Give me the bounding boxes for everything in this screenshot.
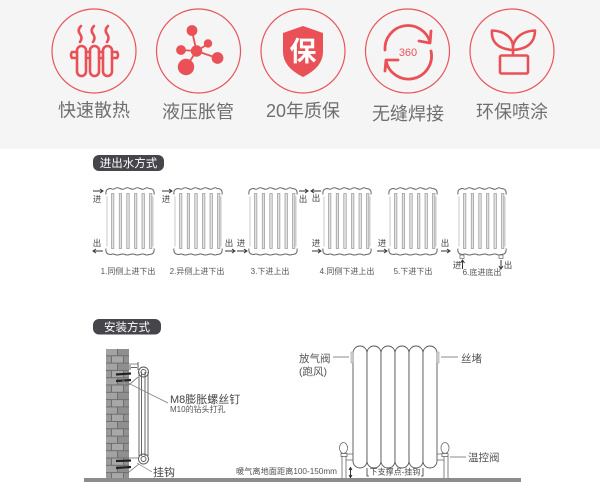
- diagram 2: opposite side top in bottom out: 出: [225, 238, 233, 248]
- feature: seamless welding: [366, 9, 450, 124]
- top feature band background: [0, 0, 600, 149]
- diagram 6: underside in underside out: [453, 188, 512, 277]
- diagram 5: bottom in bottom out: 5.下进下出: [394, 266, 432, 276]
- diagram 4: same side bottom in top out: [311, 188, 374, 276]
- diagram 1: same side top in bottom out: 1.同侧上进下出: [101, 266, 155, 276]
- diagram 4: same side bottom in top out: 4.同侧下进上出: [320, 266, 374, 276]
- side view installation diagram: [106, 349, 240, 479]
- label: drill hole: M10的钻头打孔: [170, 404, 226, 414]
- icon text: 360: 360: [399, 47, 417, 59]
- expansion screws: [116, 374, 131, 468]
- heading: water inlet and outlet methods: 进出水方式: [100, 156, 158, 170]
- diagram 5: bottom in bottom out: [377, 188, 450, 276]
- label: 20年质保: [266, 101, 340, 121]
- shield character: 保: [290, 37, 316, 67]
- diagram 3: bottom in top out: 3.下进上出: [251, 266, 289, 276]
- diagram 5: bottom in bottom out: 出: [441, 238, 449, 248]
- leader lines: [122, 380, 168, 472]
- right valve: [437, 442, 449, 478]
- label: plug: 丝堵: [461, 352, 482, 365]
- diagram 5: bottom in bottom out: 进: [378, 238, 387, 248]
- icon: shield: [283, 26, 323, 77]
- diagram 3: bottom in top out: 进: [237, 238, 246, 248]
- feature: fast heat dissipation: [52, 9, 136, 120]
- diagram 2: opposite side top in bottom out: 2.异侧上进下出: [170, 266, 224, 276]
- diagram 3: bottom in top out: [237, 188, 308, 276]
- label: 快速散热: [58, 100, 130, 120]
- radiator side profile: [138, 367, 148, 464]
- diagram 2: opposite side top in bottom out: 进: [162, 194, 171, 204]
- leader lines: [333, 357, 466, 457]
- front view radiator with valves: [236, 346, 500, 478]
- icon: molecule nodes: [177, 26, 222, 74]
- icon: potted plant: [492, 30, 535, 74]
- dimension arrow: [130, 362, 138, 370]
- diagram 6: underside in underside out: 进: [453, 260, 462, 270]
- feature: hydraulic expansion: [156, 9, 240, 122]
- floor clearance arrow: [349, 468, 352, 478]
- diagram 4: same side bottom in top out: 进: [312, 238, 321, 248]
- icon: radiator with heat waves: [71, 26, 118, 76]
- diagram 4: same side bottom in top out: 出: [312, 193, 320, 203]
- left valve: [340, 442, 353, 478]
- label: 无缝焊接: [372, 104, 444, 124]
- label: air vent: 放气阀: [299, 352, 330, 365]
- brick wall: [106, 349, 129, 478]
- heading: installation method: [93, 319, 161, 334]
- feature: eco coating: [470, 9, 554, 122]
- feature: 20 year warranty: [261, 9, 345, 121]
- diagram 6: underside in underside out: 6.底进底出: [463, 267, 501, 277]
- diagram 1: same side top in bottom out: [93, 188, 155, 276]
- radiator columns: [353, 346, 437, 468]
- air vent and plug caps: [351, 352, 439, 363]
- heading: installation method: 安装方式: [104, 320, 150, 334]
- clearance label: 暖气离地面距离100-150mm: [236, 466, 337, 476]
- diagram 3: bottom in top out: 出: [299, 194, 307, 204]
- label: bleeder: (跑风): [299, 365, 327, 378]
- label: 环保喷涂: [476, 102, 548, 122]
- label: hook: 挂钩: [153, 465, 175, 479]
- bracket lines: [129, 364, 139, 472]
- diagram 2: opposite side top in bottom out: [162, 188, 235, 276]
- lower support bracket and label: [367, 468, 423, 476]
- label: expansion screw: M8膨胀螺丝钉: [170, 392, 240, 406]
- diagram 1: same side top in bottom out: 出: [93, 238, 101, 248]
- label: 液压胀管: [162, 102, 234, 122]
- icon: 360 rotation arrows: [385, 26, 432, 79]
- floor line: [84, 478, 521, 482]
- diagram 1: same side top in bottom out: 进: [93, 194, 102, 204]
- heading: water inlet and outlet methods: [93, 155, 164, 171]
- front view radiator with valves: 下支撑点-挂钩: [370, 466, 420, 476]
- diagram 6: underside in underside out: 出: [504, 260, 512, 270]
- label: thermostatic valve: 温控阀: [468, 451, 500, 464]
